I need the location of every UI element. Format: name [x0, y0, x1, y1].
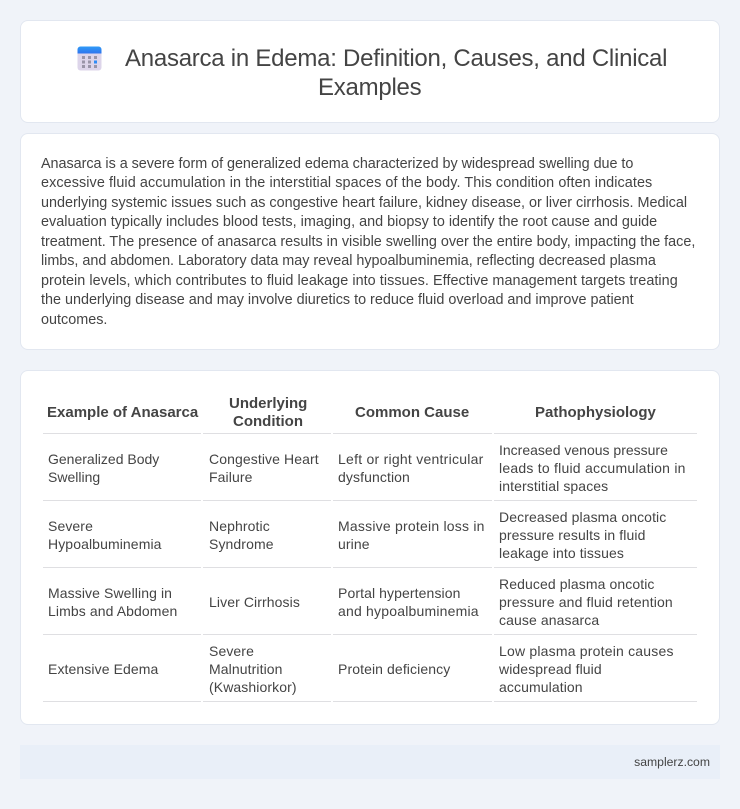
panel: table card [20, 370, 720, 725]
row 1: Congestive Heart [209, 451, 319, 467]
table header: Common Cause [355, 404, 469, 421]
row 4: accumulation [499, 679, 583, 695]
row 2: Severe [48, 518, 93, 534]
row 4: Extensive Edema [48, 661, 158, 677]
row 3: Massive Swelling in [48, 585, 172, 601]
row 1: Increased venous pressure [499, 442, 668, 458]
row 4: Low plasma protein causes [499, 643, 674, 659]
row 2: Hypoalbuminemia [48, 536, 162, 552]
title: Anasarca in Edema: Definition, Causes, and Clinical [125, 45, 667, 72]
row 3: Portal hypertension [338, 585, 461, 601]
row 2: Syndrome [209, 536, 274, 552]
title [125, 45, 667, 101]
text block: description [41, 156, 695, 328]
row 3: Limbs and Abdomen [48, 603, 177, 619]
row 1: Generalized Body [48, 451, 159, 467]
text block: description: the underlying disease and may involve diuretics to reduce fluid overload and improve patient [41, 292, 634, 308]
row 2: Massive protein loss in [338, 518, 485, 534]
panel: title card [20, 20, 720, 123]
row 1: Left or right ventricular [338, 451, 484, 467]
footer bar [20, 745, 720, 779]
row 2 [43, 509, 697, 568]
text block: description: Anasarca is a severe form of generalized edema characterized by widespread swelling due to [41, 156, 633, 172]
row 1: dysfunction [338, 469, 410, 485]
row 4: widespread fluid [499, 661, 602, 677]
row 3: and hypoalbuminemia [338, 603, 479, 619]
row 1: Swelling [48, 469, 100, 485]
text block: description: excessive fluid accumulation in the interstitial spaces of the body. This condition often indicates [41, 175, 652, 191]
row 3: pressure and fluid retention [499, 594, 673, 610]
row 2: Decreased plasma oncotic [499, 509, 666, 525]
table header: Example of Anasarca [47, 404, 198, 421]
row 4: (Kwashiorkor) [209, 679, 297, 695]
table header: Pathophysiology [535, 404, 656, 421]
row 2: pressure results in fluid [499, 527, 645, 543]
row 4: Protein deficiency [338, 661, 450, 677]
table header: Condition [233, 413, 303, 430]
row 1 [43, 442, 697, 501]
row 1: interstitial spaces [499, 478, 608, 494]
footer text: samplerz.com [634, 755, 710, 769]
icon: calendar [78, 46, 102, 70]
row 3: cause anasarca [499, 612, 599, 628]
row 1: leads to fluid accumulation in [499, 460, 686, 476]
text block: description: underlying systemic issues such as congestive heart failure, kidney disease, or liver cirrhosis. Medical [41, 195, 687, 211]
row 1: Failure [209, 469, 252, 485]
row 2: Nephrotic [209, 518, 270, 534]
text block: description: outcomes. [41, 312, 107, 328]
table header [43, 395, 697, 434]
row 4: Malnutrition [209, 661, 283, 677]
row 4 [43, 643, 697, 702]
row 3 [43, 576, 697, 635]
text block: description: protein levels, which contributes to fluid leakage into tissues. Effective management targets treating [41, 273, 678, 289]
text block: description: evaluation typically includes blood tests, imaging, and biopsy to identify the root cause and guide [41, 214, 657, 230]
row 3: Reduced plasma oncotic [499, 576, 655, 592]
title: Examples [318, 74, 421, 101]
table header: Underlying [229, 395, 307, 412]
row 3: Liver Cirrhosis [209, 594, 300, 610]
row 2: urine [338, 536, 370, 552]
text block: description: limbs, and abdomen. Laboratory data may reveal hypoalbuminemia, reflecting decreased plasma [41, 253, 656, 269]
table [43, 395, 697, 702]
row 2: leakage into tissues [499, 545, 624, 561]
row 4: Severe [209, 643, 254, 659]
panel: description card [20, 133, 720, 350]
text block: description: treatment. The presence of anasarca results in visible swelling over the entire body, impacting the face, [41, 234, 695, 250]
